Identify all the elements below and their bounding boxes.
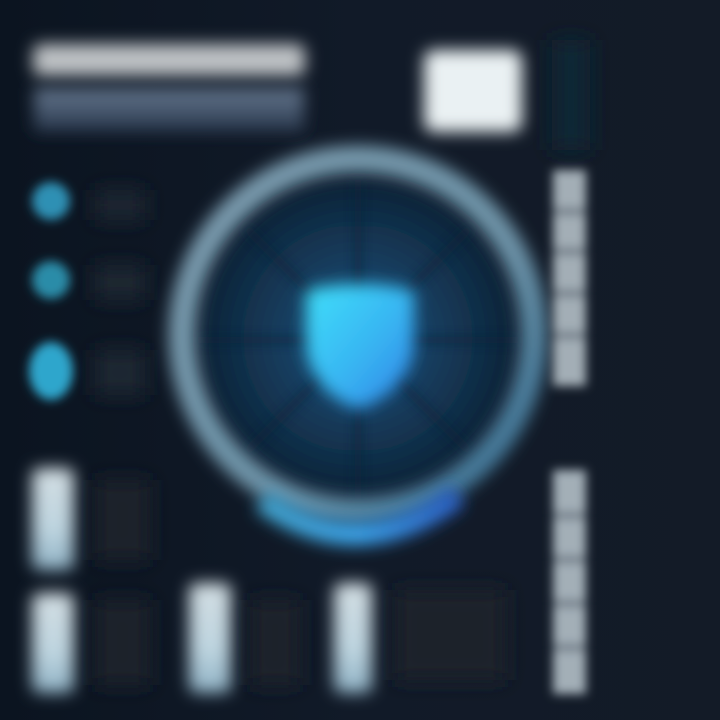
title bar [33, 44, 305, 76]
bottom middle bar [189, 583, 231, 693]
right column bottom bar [553, 470, 586, 694]
radial spokes [198, 180, 518, 500]
right top dark accent [552, 40, 590, 150]
subtitle block [34, 88, 304, 132]
icon: middle dot [32, 261, 70, 299]
list text placeholders [95, 190, 145, 395]
central ring diagram [182, 159, 534, 534]
bottom centre bar [334, 583, 372, 693]
right column top bar [553, 170, 586, 386]
icon: shield [306, 284, 414, 410]
icon: lower dot [29, 342, 73, 400]
bottom left bar lower [32, 593, 74, 693]
disc [193, 173, 523, 503]
list icons: left column [29, 182, 73, 400]
icon: top dot [32, 182, 70, 220]
bottom placeholder text [95, 480, 505, 685]
bottom left bar upper [32, 468, 74, 570]
bottom arc accent [262, 495, 458, 534]
ring [182, 159, 534, 511]
white square icon [424, 50, 522, 132]
